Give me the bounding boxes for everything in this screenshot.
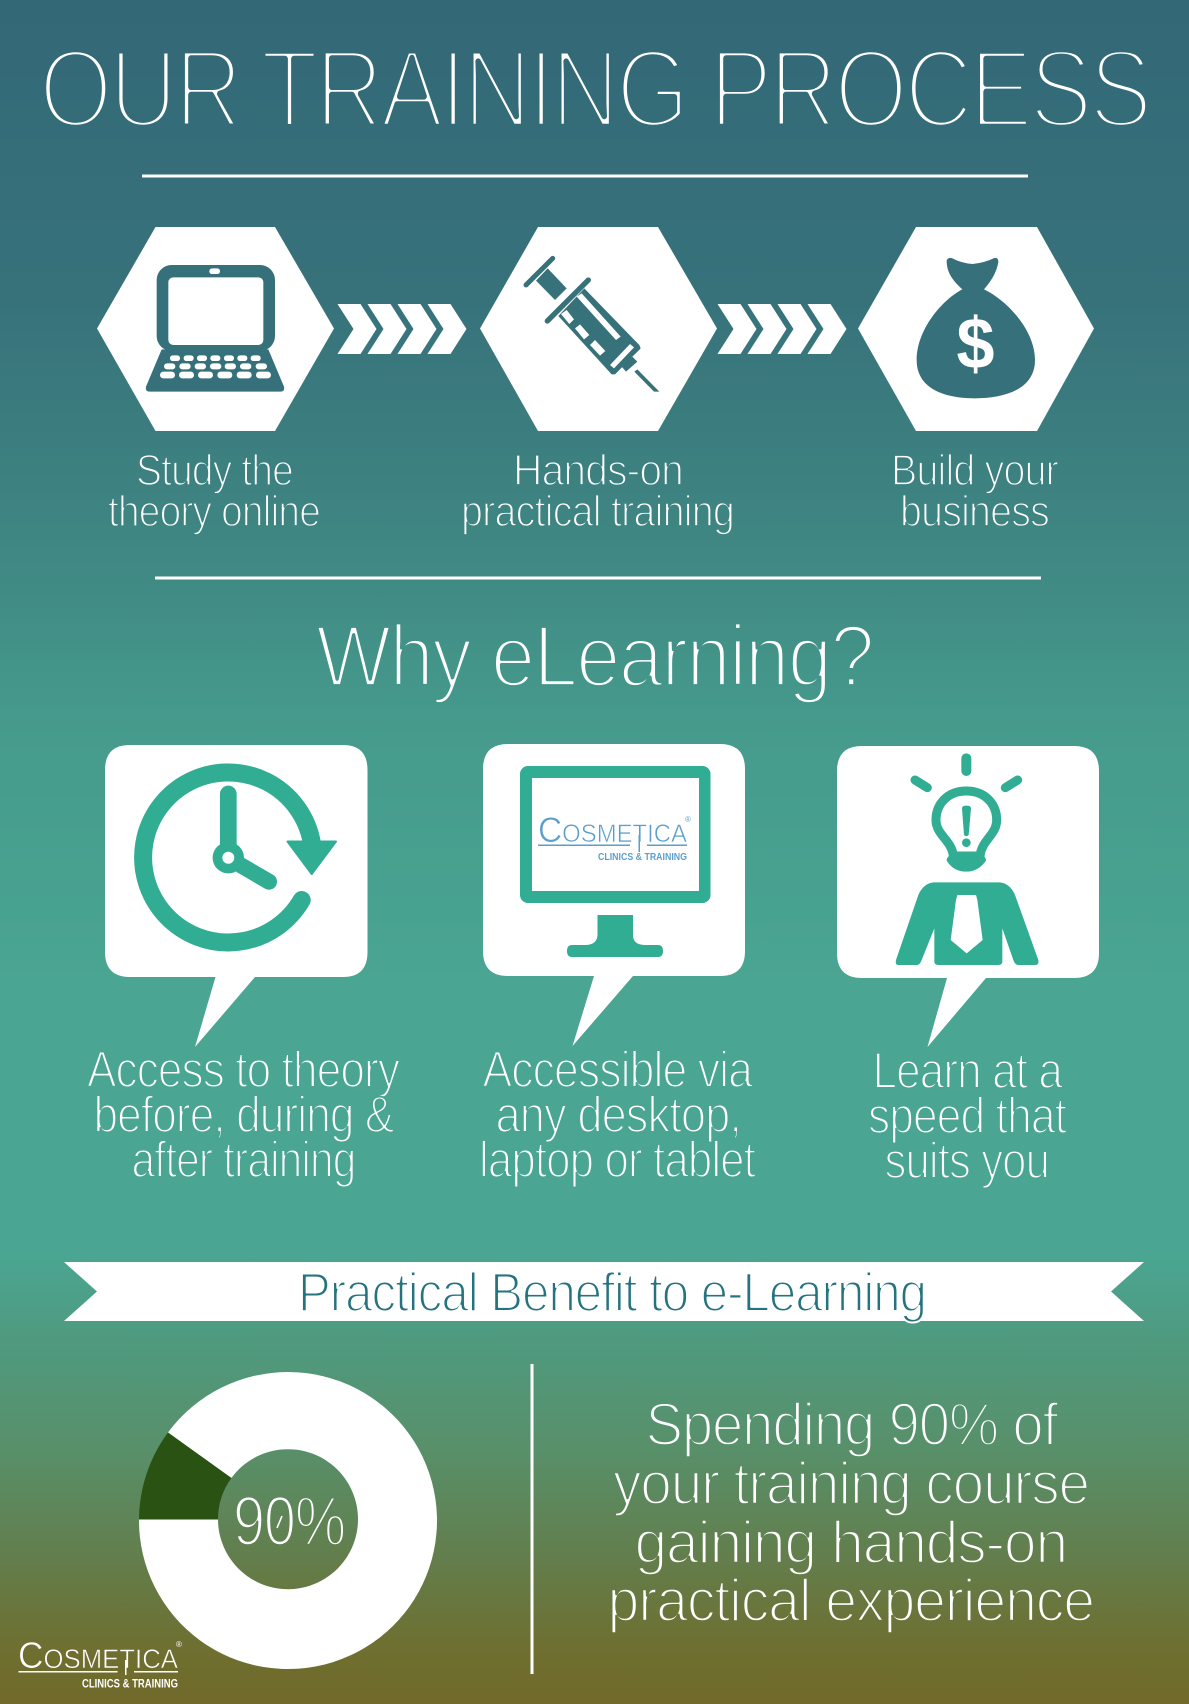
step label: study the theory online: theory online [108,488,320,536]
label: access to theory [87,1041,400,1188]
logo: monitor screen: CLINICS & TRAINING [598,851,687,863]
logo: cosmetica footer: COSMETICA [18,1635,178,1676]
label: accessible via any device: any desktop, [496,1086,741,1143]
banner: practical benefit: Practical Benefit to e-Learning [298,1261,926,1323]
text: spending 90 percent [608,1391,1094,1634]
step label: hands-on practical training: Hands-on [513,447,683,495]
arrow: chevrons one [338,304,466,354]
heading: why elearning: Why eLearning? [316,608,873,705]
panel: device bubble [483,744,745,1046]
text: spending 90 percent: your training course [613,1450,1089,1517]
panel: training process steps [97,227,1094,536]
label: accessible via any device [479,1041,756,1188]
text: spending 90 percent: practical experience [608,1567,1094,1634]
icon: money bag hexagon: $ [956,304,994,384]
panel: access bubble [105,745,368,1047]
donut value: 90% [233,1482,345,1560]
step label: hands-on practical training [461,447,734,536]
logo: monitor screen: COSMETICA [538,811,687,850]
label: access to theory: before, during & [94,1086,394,1143]
icon: monitor [520,766,710,957]
icon: syringe hexagon [480,227,717,431]
label: accessible via any device: laptop or tablet [479,1131,756,1188]
step label: hands-on practical training: practical training [461,488,734,536]
text: spending 90 percent: Spending 90% of [646,1391,1058,1458]
label: learn at a speed: speed that [868,1087,1067,1144]
step label: study the theory online [108,447,320,536]
step label: build your business: Build your [891,447,1058,495]
arrow: chevrons two [718,304,846,354]
icon: laptop hexagon [97,227,334,431]
label: accessible via any device: Accessible via [482,1041,753,1098]
icon: idea person [896,753,1039,965]
text: spending 90 percent: gaining hands-on [634,1509,1067,1576]
panel: speed bubble [837,746,1099,1047]
label: access to theory: after training [132,1131,356,1188]
label: learn at a speed: suits you [884,1132,1049,1189]
step label: study the theory online: Study the [136,447,293,495]
logo: cosmetica footer: CLINICS & TRAINING [82,1676,178,1690]
chart: donut 90 percent [139,1372,437,1669]
label: access to theory: Access to theory [87,1041,400,1098]
label: learn at a speed: Learn at a [872,1042,1063,1099]
step label: build your business [891,447,1058,536]
step label: build your business: business [900,488,1049,536]
label: learn at a speed [868,1042,1067,1189]
logo: cosmetica footer: ® [176,1640,182,1649]
icon: clock [143,772,336,942]
icon: money bag hexagon [858,227,1094,431]
banner: practical benefit [64,1261,1144,1323]
logo: monitor screen: ® [685,815,691,824]
